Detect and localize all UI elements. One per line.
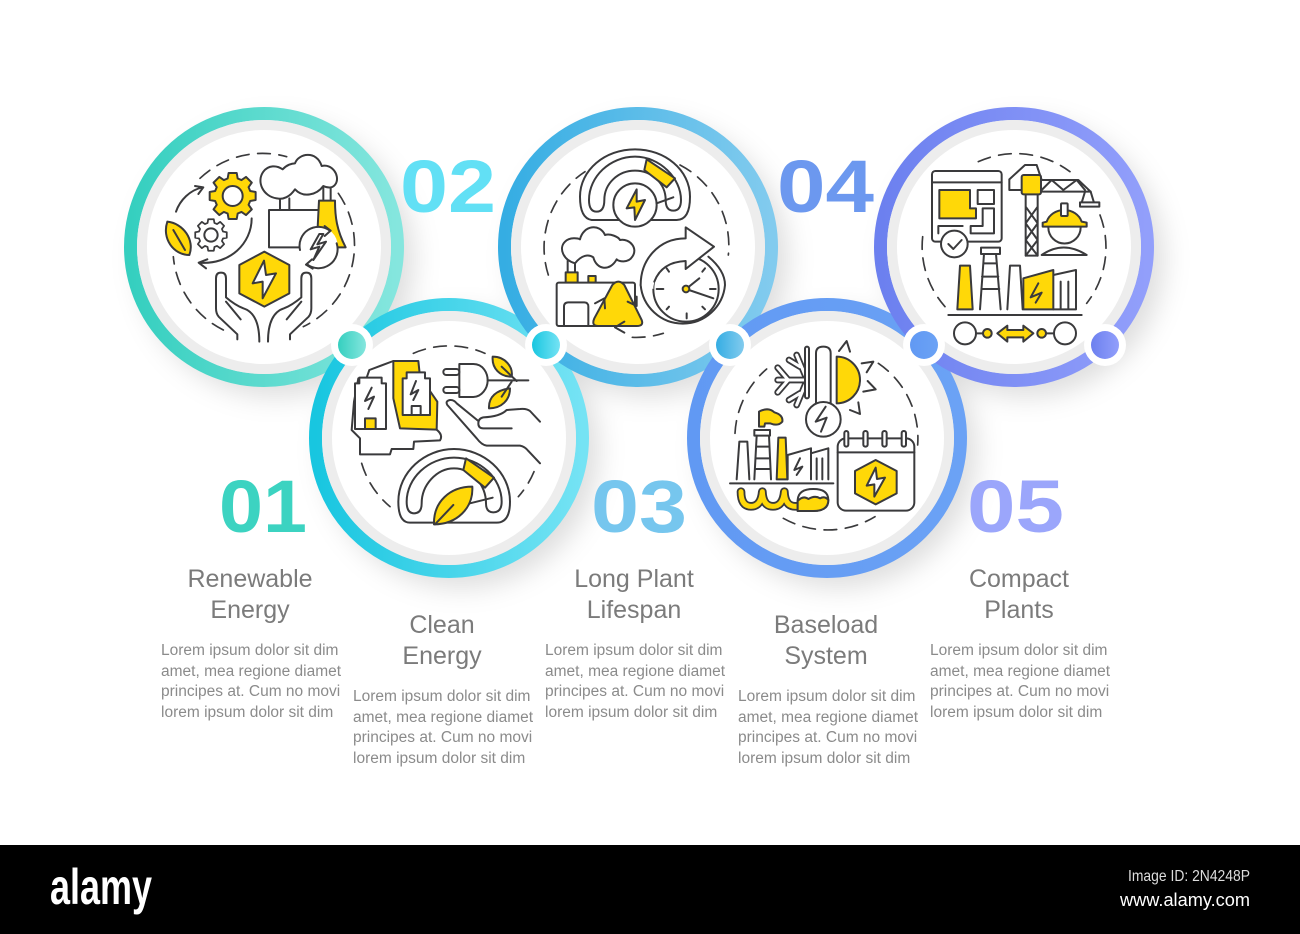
ring 3	[504, 114, 772, 380]
heading: renewable energy: Renewable	[187, 565, 313, 593]
description: renewable energy: principes at. Cum no movi	[161, 683, 340, 700]
icon: compact plants	[922, 154, 1106, 344]
inner disc 3	[516, 125, 760, 369]
panel: circle 5 compact plants	[880, 114, 1148, 380]
heading: compact plants: Compact	[969, 565, 1069, 593]
panel: circle 1 renewable energy	[130, 114, 398, 380]
heading: baseload system: System	[784, 642, 868, 670]
text block: compact plants	[930, 565, 1111, 721]
heading: compact plants: Plants	[984, 596, 1054, 624]
number 03: 03	[591, 465, 687, 548]
footer bar	[0, 845, 1300, 934]
text block: long plant lifespan	[545, 565, 726, 721]
description: renewable energy: Lorem ipsum dolor sit dim	[161, 642, 338, 659]
footer image id: Image ID: 2N4248P	[1128, 868, 1250, 885]
number 05: 05	[967, 465, 1064, 548]
number 04: 04	[777, 145, 874, 228]
connector dot 5	[1084, 324, 1126, 366]
heading: clean energy: Energy	[402, 642, 482, 670]
panel: circle 2 clean energy	[316, 304, 582, 572]
icon: baseload system	[730, 341, 918, 530]
description: long plant lifespan: Lorem ipsum dolor sit dim	[545, 642, 722, 659]
inner disc 2	[327, 316, 571, 560]
ring 5	[880, 114, 1148, 380]
description: compact plants: principes at. Cum no movi	[930, 683, 1109, 700]
description: long plant lifespan: amet, mea regione diamet	[545, 663, 726, 680]
description: compact plants: amet, mea regione diamet	[930, 663, 1111, 680]
connector dot 4	[903, 324, 945, 366]
panel: circle 4 baseload system	[694, 304, 960, 572]
heading: renewable energy: Energy	[210, 596, 290, 624]
connector dot 2	[525, 324, 567, 366]
inner disc 4	[705, 316, 949, 560]
footer logo: alamy	[50, 859, 152, 915]
heading: long plant lifespan: Lifespan	[587, 596, 681, 624]
heading: clean energy: Clean	[409, 611, 475, 639]
heading: baseload system: Baseload	[774, 611, 878, 639]
number 02: 02	[400, 145, 496, 228]
description: baseload system: lorem ipsum dolor sit dim	[738, 750, 910, 767]
description: clean energy: Lorem ipsum dolor sit dim	[353, 688, 530, 705]
description: clean energy: amet, mea regione diamet	[353, 709, 534, 726]
icon: clean energy	[352, 346, 540, 524]
description: clean energy: lorem ipsum dolor sit dim	[353, 750, 525, 767]
inner disc 5	[892, 125, 1136, 369]
icon: long plant lifespan	[544, 149, 729, 337]
panel: circle 3 long plant lifespan	[504, 114, 772, 380]
heading: long plant lifespan: Long Plant	[574, 565, 694, 593]
connector dot 1	[331, 324, 373, 366]
description: baseload system: Lorem ipsum dolor sit dim	[738, 688, 915, 705]
drop shadows behind circles	[138, 121, 1164, 588]
icon: renewable energy	[166, 153, 355, 342]
description: long plant lifespan: lorem ipsum dolor sit dim	[545, 704, 717, 721]
number 01: 01	[219, 465, 307, 548]
description: compact plants: Lorem ipsum dolor sit dim	[930, 642, 1107, 659]
text block: clean energy	[353, 611, 534, 767]
description: compact plants: lorem ipsum dolor sit dim	[930, 704, 1102, 721]
text block: renewable energy	[161, 565, 342, 721]
ring 2	[316, 304, 582, 572]
description: renewable energy: amet, mea regione diamet	[161, 663, 342, 680]
ring 4	[694, 304, 960, 572]
footer url: www.alamy.com	[1119, 890, 1250, 910]
inner disc 1	[142, 125, 386, 369]
ring 1	[130, 114, 398, 380]
text block: baseload system	[738, 611, 919, 767]
description: long plant lifespan: principes at. Cum no movi	[545, 683, 724, 700]
connector dot 3	[709, 324, 751, 366]
description: renewable energy: lorem ipsum dolor sit dim	[161, 704, 333, 721]
description: baseload system: principes at. Cum no movi	[738, 729, 917, 746]
description: baseload system: amet, mea regione diamet	[738, 709, 919, 726]
description: clean energy: principes at. Cum no movi	[353, 729, 532, 746]
